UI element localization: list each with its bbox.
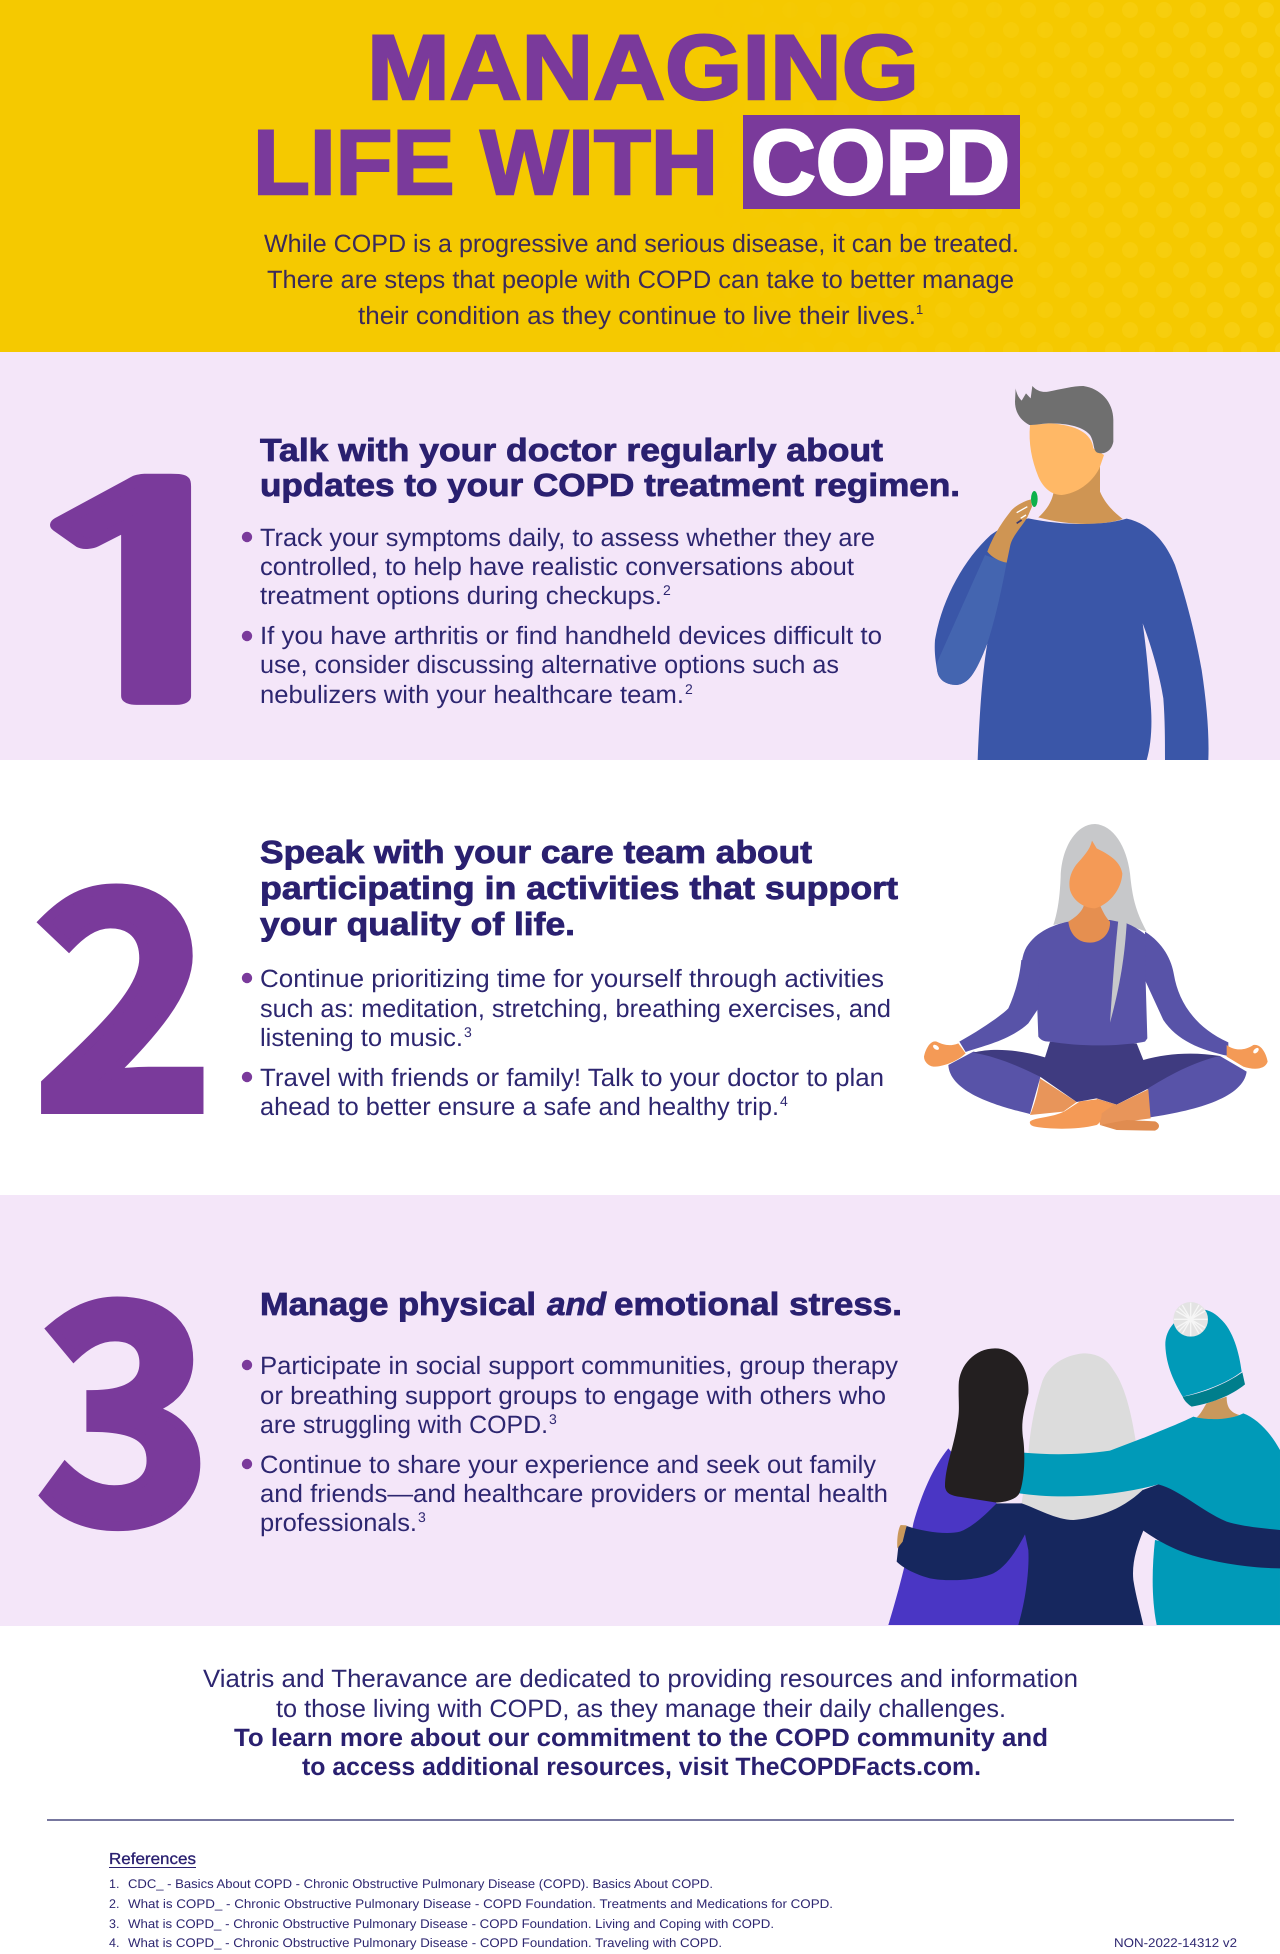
teal arm and shoulders bbox=[1019, 1413, 1280, 1550]
intro text: There are steps that people with COPD can take to better manage bbox=[267, 266, 1014, 294]
neck bbox=[1197, 1397, 1239, 1420]
references: What is COPD_ - Chronic Obstructive Pulmonary Disease - COPD Foundation. Traveling with COPD. bbox=[128, 1936, 722, 1950]
heading 2: Speak with your care team about bbox=[260, 834, 812, 870]
bullet: social support: are struggling with COPD. bbox=[260, 1411, 548, 1439]
bullet: travel: Travel with friends or family! Talk to your doctor to plan bbox=[260, 1064, 884, 1092]
right arm bbox=[1145, 932, 1228, 1056]
references: References bbox=[109, 1851, 196, 1868]
heading 1: Talk with your doctor regularly about bbox=[260, 432, 883, 468]
bullet: travel: 4 bbox=[780, 1093, 788, 1109]
hand bbox=[987, 499, 1032, 563]
purple top bbox=[888, 1448, 1040, 1625]
left arm bbox=[959, 960, 1040, 1052]
references: CDC_ - Basics About COPD - Chronic Obstructive Pulmonary Disease (COPD). Basics About COPD. bbox=[128, 1877, 713, 1891]
references: 3. bbox=[109, 1917, 119, 1931]
neck bbox=[1038, 467, 1123, 524]
bullet: travel bbox=[242, 1064, 884, 1121]
references: What is COPD_ - Chronic Obstructive Pulmonary Disease - COPD Foundation. Treatments and Medications for COPD. bbox=[128, 1897, 833, 1911]
face bbox=[1069, 841, 1122, 908]
heading 2: participating in activities that support bbox=[260, 870, 898, 906]
references: What is COPD_ - Chronic Obstructive Pulmonary Disease - COPD Foundation. Living and Coping with COPD. bbox=[128, 1917, 774, 1931]
bullet: social support: or breathing support groups to engage with others who bbox=[260, 1382, 886, 1410]
navy top and arms bbox=[897, 1484, 1280, 1625]
heading 3: Manage physical bbox=[260, 1286, 536, 1322]
bullet: social support: 3 bbox=[549, 1411, 557, 1427]
bullet: prioritizing time bbox=[242, 965, 891, 1052]
bullet: prioritizing time: such as: meditation, stretching, breathing exercises, and bbox=[260, 995, 891, 1023]
sleeve highlight bbox=[937, 555, 1007, 685]
legs bbox=[948, 1052, 1247, 1117]
bullet: arthritis: nebulizers with your healthcare team. bbox=[260, 681, 684, 709]
heading 3 bbox=[260, 1286, 902, 1322]
illustration: man taking pill bbox=[935, 386, 1209, 760]
face bbox=[1030, 423, 1104, 495]
panel: step 2 bbox=[0, 760, 1280, 1196]
heading 3: and bbox=[547, 1286, 608, 1322]
hair lock bbox=[1110, 920, 1127, 1023]
bullet: prioritizing time: Continue prioritizing time for yourself through activities bbox=[260, 965, 884, 993]
bullet: track symptoms: 2 bbox=[663, 582, 671, 598]
bullet: share experience: and friends—and healthcare providers or mental health bbox=[260, 1480, 888, 1508]
references: 2. bbox=[109, 1897, 119, 1911]
bullet: prioritizing time: listening to music. bbox=[260, 1024, 463, 1052]
closing statement bbox=[203, 1665, 1078, 1781]
bullet: travel: ahead to better ensure a safe and healthy trip. bbox=[260, 1093, 779, 1121]
bullet: arthritis: If you have arthritis or find handheld devices difficult to bbox=[260, 622, 882, 650]
hands bbox=[924, 1041, 1268, 1069]
hat band bbox=[1183, 1372, 1245, 1407]
bullet: share experience: 3 bbox=[418, 1509, 426, 1525]
heading 1 bbox=[260, 432, 960, 503]
black hair bbox=[945, 1348, 1028, 1503]
bullet: share experience: Continue to share your experience and seek out family bbox=[260, 1451, 876, 1479]
hat bbox=[1165, 1309, 1242, 1397]
neck bbox=[1068, 905, 1110, 943]
intro text: While COPD is a progressive and serious disease, it can be treated. bbox=[264, 230, 1019, 258]
sweater torso bbox=[1021, 920, 1163, 1045]
bullet: track symptoms bbox=[242, 524, 875, 610]
panel: yellow header bbox=[0, 0, 1280, 352]
bullet: arthritis: use, consider discussing alternative options such as bbox=[260, 651, 839, 679]
illustration: three friends embracing bbox=[888, 1302, 1280, 1625]
illustration: woman meditating bbox=[924, 824, 1268, 1131]
references: 1. bbox=[109, 1877, 119, 1891]
bullet: social support bbox=[242, 1352, 898, 1439]
bullet: track symptoms: treatment options during checkups. bbox=[260, 582, 662, 610]
panel: step 1 bbox=[0, 352, 1280, 760]
title: LIFE WITH bbox=[253, 112, 718, 214]
intro text: their condition as they continue to live their lives. bbox=[358, 302, 916, 330]
number 3: 3 bbox=[37, 1175, 212, 1609]
document code: NON-2022-14312 v2 bbox=[1114, 1936, 1237, 1950]
intro text: 1 bbox=[916, 302, 923, 317]
feet bbox=[1100, 1120, 1159, 1131]
title: MANAGING bbox=[367, 17, 919, 119]
bullet: arthritis: 2 bbox=[685, 681, 693, 697]
bullet: arthritis bbox=[242, 622, 882, 709]
bullet: social support: Participate in social support communities, group therapy bbox=[260, 1352, 898, 1380]
bullet: share experience bbox=[242, 1451, 888, 1537]
sweater bbox=[935, 518, 1209, 760]
grey hair bbox=[1022, 1353, 1143, 1520]
pom-pom bbox=[1173, 1302, 1208, 1337]
heading 3: emotional stress. bbox=[614, 1286, 902, 1322]
back hair bbox=[1053, 824, 1147, 932]
hand bbox=[897, 1525, 907, 1548]
number 2: 2 bbox=[33, 762, 214, 1196]
pill bbox=[1031, 491, 1038, 507]
bullet: track symptoms: Track your symptoms daily, to assess whether they are bbox=[260, 524, 875, 552]
panel: step 3 bbox=[0, 1175, 1280, 1626]
bullet: track symptoms: controlled, to help have realistic conversations about bbox=[260, 553, 854, 581]
heading 2: your quality of life. bbox=[260, 906, 575, 942]
closing statement: to those living with COPD, as they manage their daily challenges. bbox=[276, 1695, 1006, 1723]
hair bbox=[1015, 386, 1113, 453]
title bbox=[253, 17, 1020, 214]
closing statement: To learn more about our commitment to the COPD community and bbox=[234, 1724, 1048, 1752]
lower legs bbox=[1030, 1078, 1151, 1125]
bullet: prioritizing time: 3 bbox=[464, 1024, 472, 1040]
heading 1: updates to your COPD treatment regimen. bbox=[260, 467, 960, 503]
number 1: 1 bbox=[0, 455, 295, 743]
title: COPD bbox=[751, 112, 1010, 214]
heading 2 bbox=[260, 834, 898, 942]
references bbox=[109, 1851, 833, 1950]
shorts bbox=[973, 1042, 1220, 1105]
closing statement: to access additional resources, visit TheCOPDFacts.com. bbox=[302, 1753, 981, 1781]
bullet: share experience: professionals. bbox=[260, 1509, 417, 1537]
intro text bbox=[264, 230, 1019, 330]
teal sweater body bbox=[1153, 1540, 1280, 1625]
closing statement: Viatris and Theravance are dedicated to providing resources and information bbox=[203, 1665, 1078, 1693]
references: 4. bbox=[109, 1936, 119, 1950]
